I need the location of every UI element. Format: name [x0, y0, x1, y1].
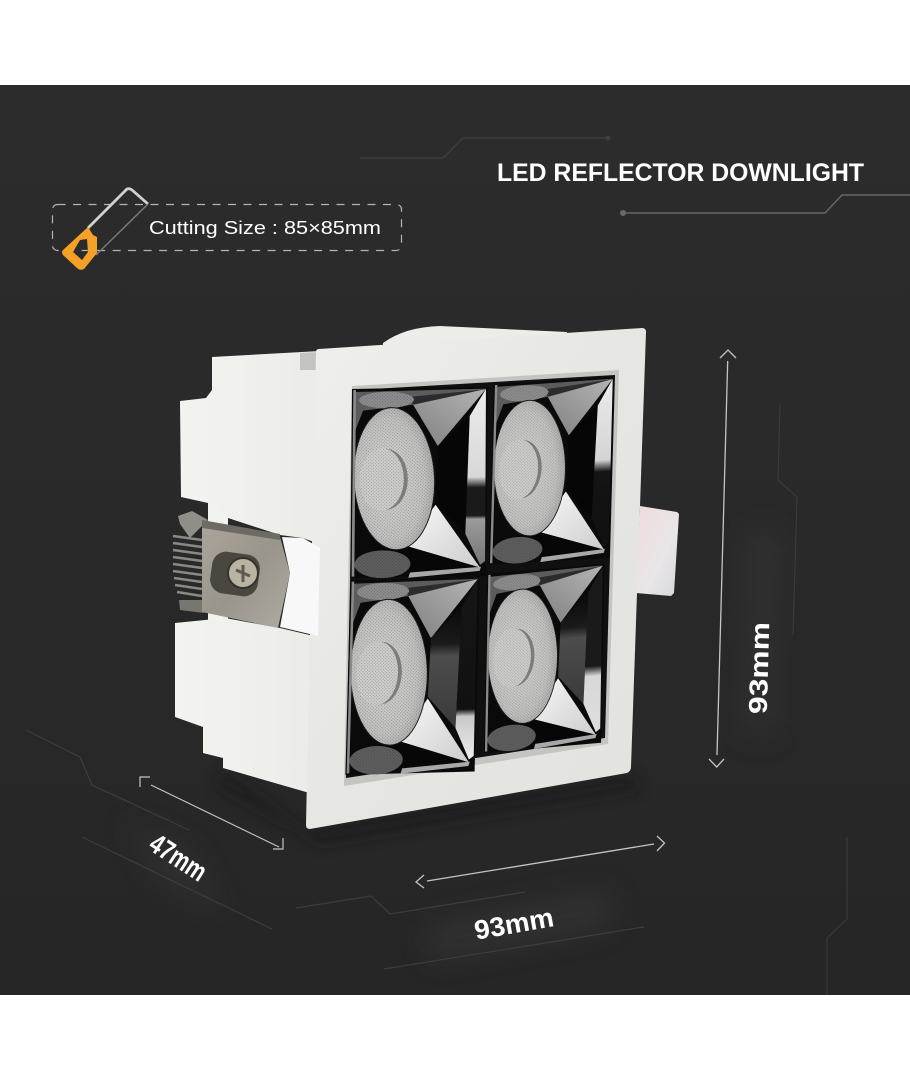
reflector cell bottom right	[482, 564, 604, 753]
decorative circuit line: top	[360, 136, 610, 158]
spring	[173, 536, 202, 596]
cutting size text: Cutting Size : 85×85mm	[149, 218, 381, 238]
dimension label: 47mm: 47mm	[144, 828, 213, 887]
reflector cell top left	[348, 387, 488, 578]
rear bracket tab	[636, 506, 679, 596]
title: LED REFLECTOR DOWNLIGHT	[497, 159, 864, 187]
lower housing block	[175, 618, 320, 795]
reflector cell bottom left	[343, 577, 480, 775]
dimension label: 93mm height: 93mm	[743, 622, 775, 714]
dashed outline	[52, 204, 402, 250]
icon: hand saw	[62, 189, 148, 270]
upper housing block	[180, 351, 322, 545]
decorative circuit lines: right	[778, 403, 847, 995]
screw	[228, 558, 258, 588]
recessed opening	[344, 370, 619, 786]
callout: cutting size	[52, 189, 402, 270]
decorative circuit line: under title	[620, 195, 910, 216]
white strip behind clip	[208, 500, 228, 625]
white clip end	[280, 537, 320, 636]
decorative circuit lines: lower left	[26, 730, 272, 929]
dimension arrow: height	[709, 350, 736, 767]
shadow under product	[215, 770, 640, 845]
front plate	[306, 328, 646, 829]
rear dome	[383, 326, 567, 352]
dimension arrow: width	[416, 836, 664, 888]
metal plate	[202, 526, 290, 628]
dimension label: 93mm width: 93mm	[472, 902, 556, 946]
product: LED downlight	[173, 326, 679, 829]
decorative circuit lines: bottom centre	[296, 892, 644, 969]
dimension arrow: depth	[140, 777, 283, 849]
reflector cell top right	[487, 377, 615, 565]
mounting slot	[208, 550, 262, 598]
soft label glows behind dimensions	[125, 530, 780, 960]
spring clip	[173, 511, 320, 636]
grey gap beside plate	[300, 352, 318, 370]
